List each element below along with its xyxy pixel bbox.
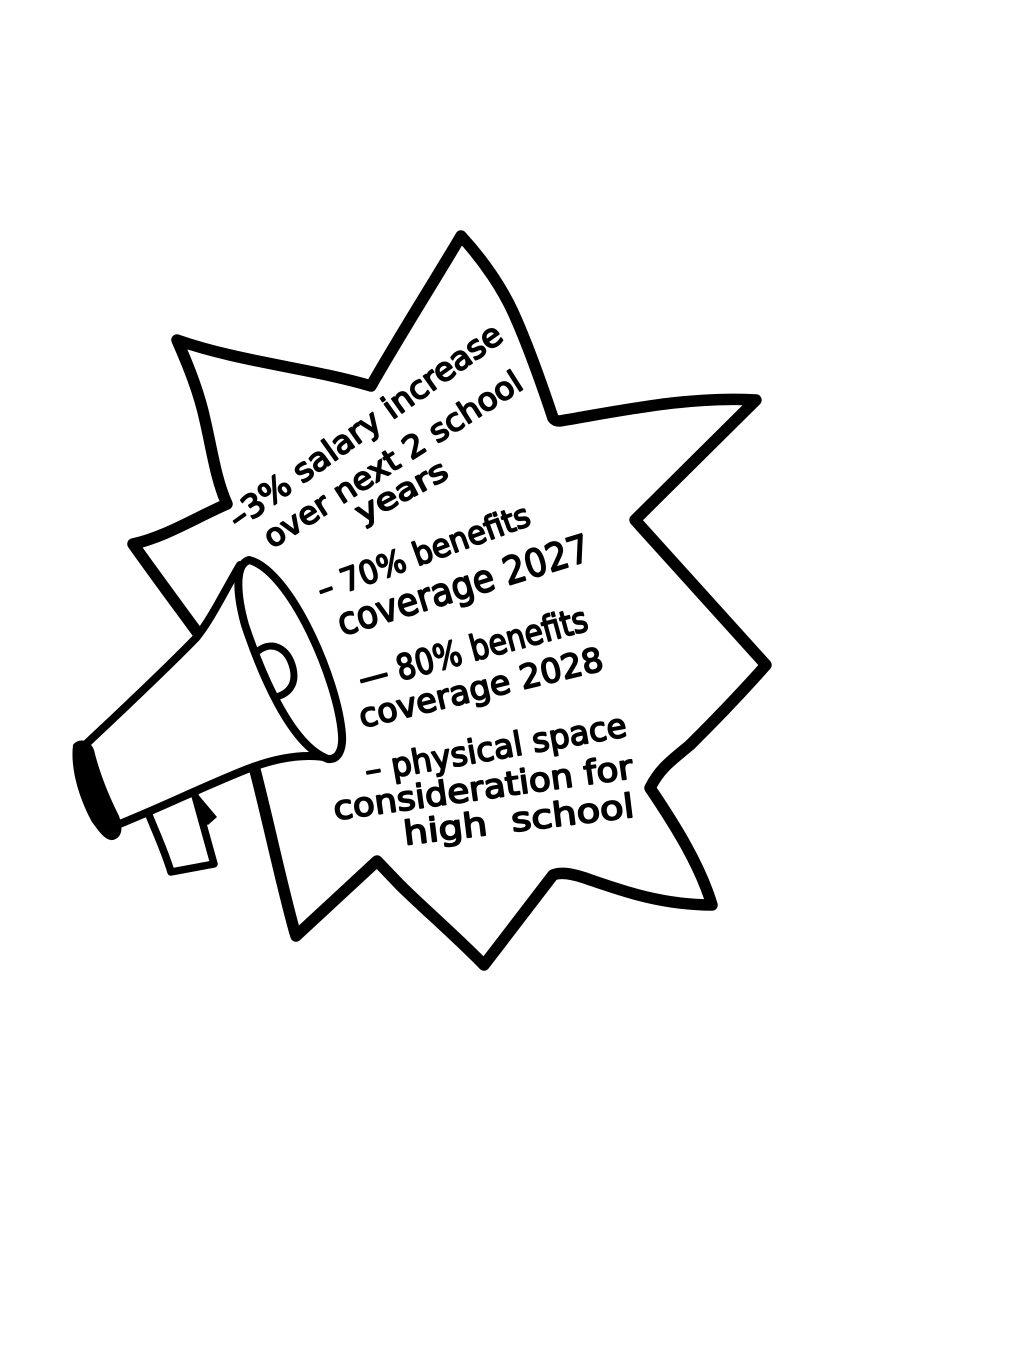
line: 80% benefits: — 80% benefits <box>354 600 592 700</box>
line: coverage 2028: coverage 2028 <box>355 639 607 736</box>
megaphone body <box>83 565 330 825</box>
line: 70% benefits: – 70% benefits <box>312 496 535 609</box>
line: over next 2 school: over next 2 school <box>257 364 529 556</box>
megaphone trigger <box>196 792 217 825</box>
megaphone speaker <box>258 646 294 697</box>
megaphone mouth <box>238 560 342 759</box>
line: coverage 2027: coverage 2027 <box>332 526 595 645</box>
megaphone handle <box>149 792 214 872</box>
starburst speech bubble <box>133 236 766 965</box>
megaphone end cap <box>72 741 121 840</box>
icon: megaphone <box>72 560 342 872</box>
announcement text <box>221 315 636 853</box>
line: physical space: – physical space <box>362 705 629 790</box>
line: 3% salary increase: –3% salary increase <box>221 315 510 537</box>
line: high school: high school <box>401 786 636 853</box>
line: consideration for: consideration for <box>331 747 636 828</box>
line: years: years <box>349 453 454 531</box>
